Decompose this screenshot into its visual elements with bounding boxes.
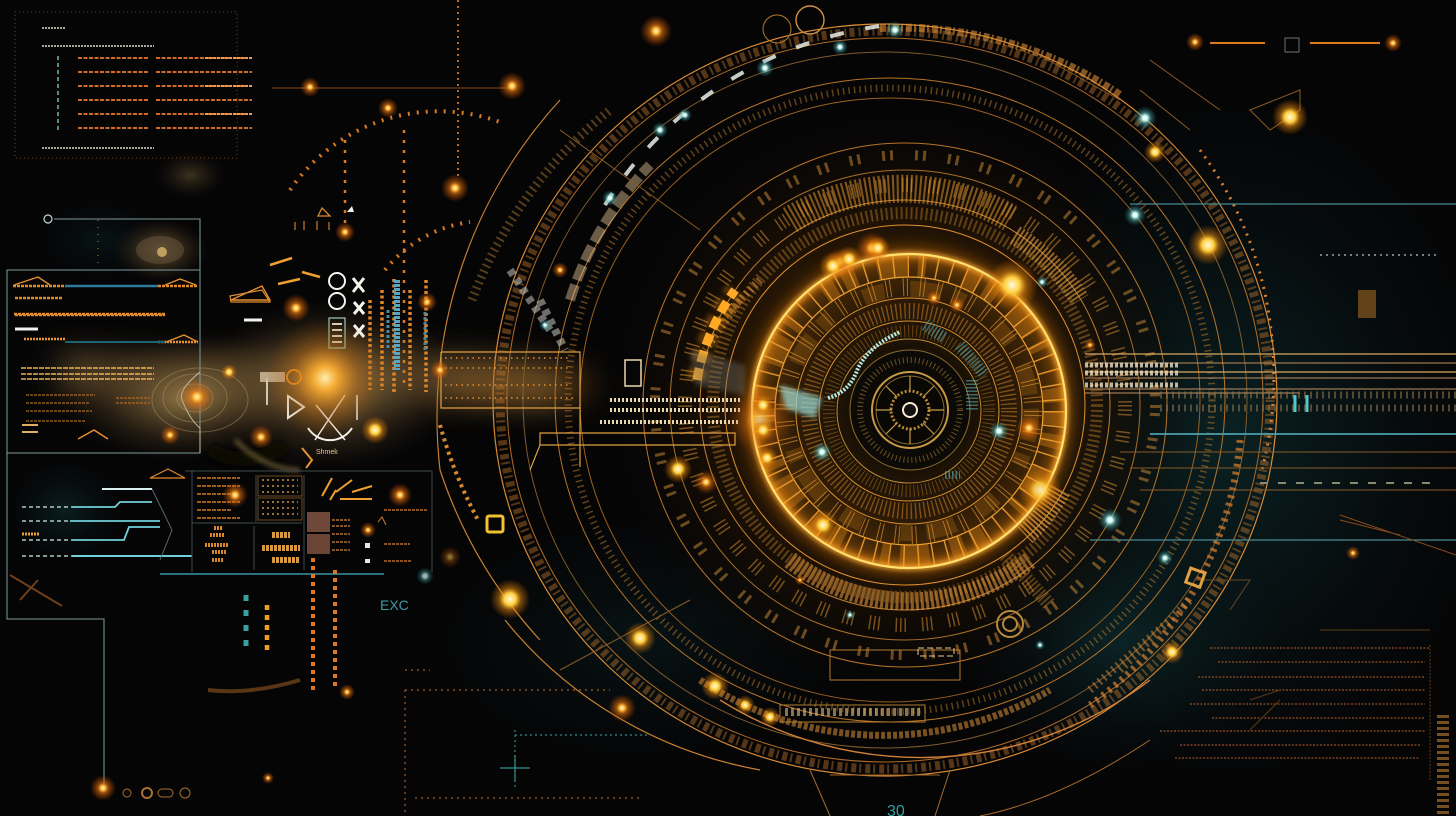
- label: bottom-left icons: [123, 788, 190, 798]
- arc: bright left segment: [697, 290, 735, 380]
- panel: left status text rows: [13, 277, 270, 453]
- icons: central-left glyph cluster: Shmek: [316, 449, 338, 456]
- chart: left vertical bar columns: [272, 0, 510, 392]
- panel: upper-left galaxy frame: [7, 215, 200, 453]
- lit amber cells: [764, 266, 1054, 556]
- panel: right data streams: [1085, 38, 1456, 610]
- arc: middle band segments: [643, 143, 1167, 667]
- arc: white top segment: [605, 26, 880, 205]
- panel: top-left data table: [15, 12, 252, 158]
- arc: outer ring: [437, 6, 1300, 816]
- galaxy spiral rings: [152, 368, 248, 432]
- cyan sparkle data: [780, 385, 822, 418]
- main ring stroke: [752, 254, 1066, 568]
- icon: spiral eye: [136, 236, 184, 264]
- chart: main glowing ring: [752, 254, 1066, 568]
- label: EXC: EXC: [380, 597, 409, 613]
- panel: lower-center mini charts: [150, 469, 432, 574]
- panel: lower-center details: [208, 558, 1205, 816]
- icons: central-left glyph cluster: [230, 206, 364, 468]
- panel: lower-left cyan signal lines: [7, 453, 192, 785]
- panel: left central data block: [440, 270, 745, 532]
- panel: lower-right orange lines: [1160, 630, 1443, 816]
- center dial: [850, 350, 970, 470]
